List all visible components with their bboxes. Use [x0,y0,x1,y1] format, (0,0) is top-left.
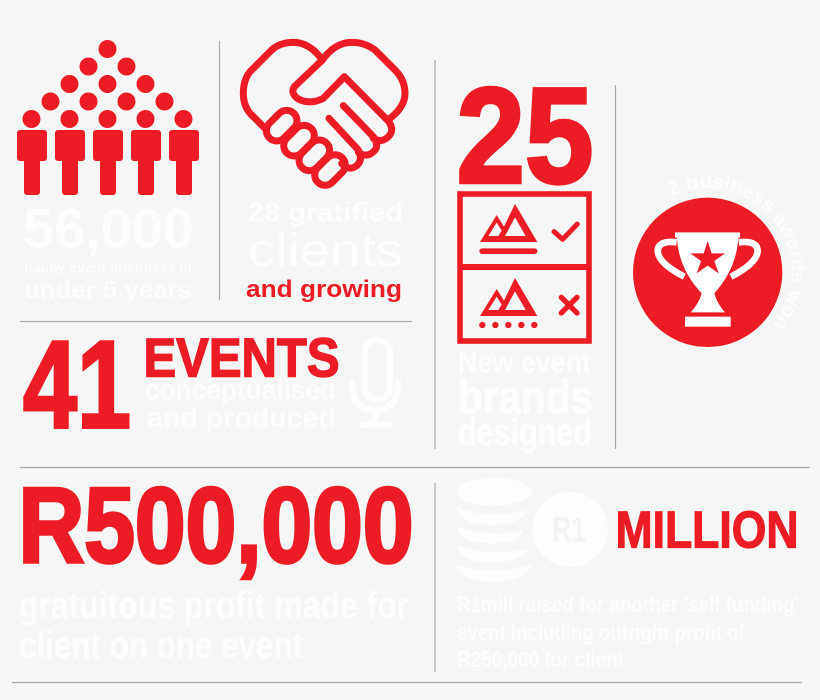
panel: brands [456,60,594,454]
icon: microphone [352,340,398,425]
panel: events [23,316,398,454]
caption: designed: designed [458,412,592,454]
icon: trophy badge [633,198,782,347]
caption: 28 gratified: 28 gratified [248,197,403,227]
icon: R1 coin [532,492,608,567]
caption: clients: clients [248,224,403,276]
stat: 41: 41 [23,316,131,454]
caption: under 5 years: under 5 years [24,277,192,304]
caption: happy event attendees in: happy event attendees in [24,260,192,275]
icon: crowd of people [17,40,199,195]
caption: brands: brands [458,370,593,423]
caption: client on one event: client on one event [19,625,303,667]
icon: handshake heart [243,42,405,190]
panel: awards [633,198,782,347]
stat: 56,000: 56,000 [23,197,194,261]
caption: and produced: and produced [147,402,336,433]
icon: brand review cards [460,194,589,341]
caption: and growing: and growing [246,276,402,303]
icon: R1 coin: R1 [552,511,586,550]
panel: fundraising [456,478,799,672]
panel: attendees [17,40,199,304]
panel: profit [18,465,414,667]
caption: fundraising line 3: R250,000 for client [457,647,625,672]
icon: coin stack [456,478,532,582]
heading: EVENTS: EVENTS [144,326,340,388]
caption: New event: New event [458,344,591,380]
caption: conceptualised: conceptualised [145,374,336,405]
panel: clients [243,42,405,303]
stat: R500,000: R500,000 [18,465,414,585]
caption: 2 business awards won (curved): 2 business awards won [665,171,809,335]
stat: 25: 25 [456,60,594,212]
caption: gratuitous profit made for: gratuitous profit made for [19,585,409,627]
caption: fundraising line 2: event including outright profit of [457,620,746,645]
